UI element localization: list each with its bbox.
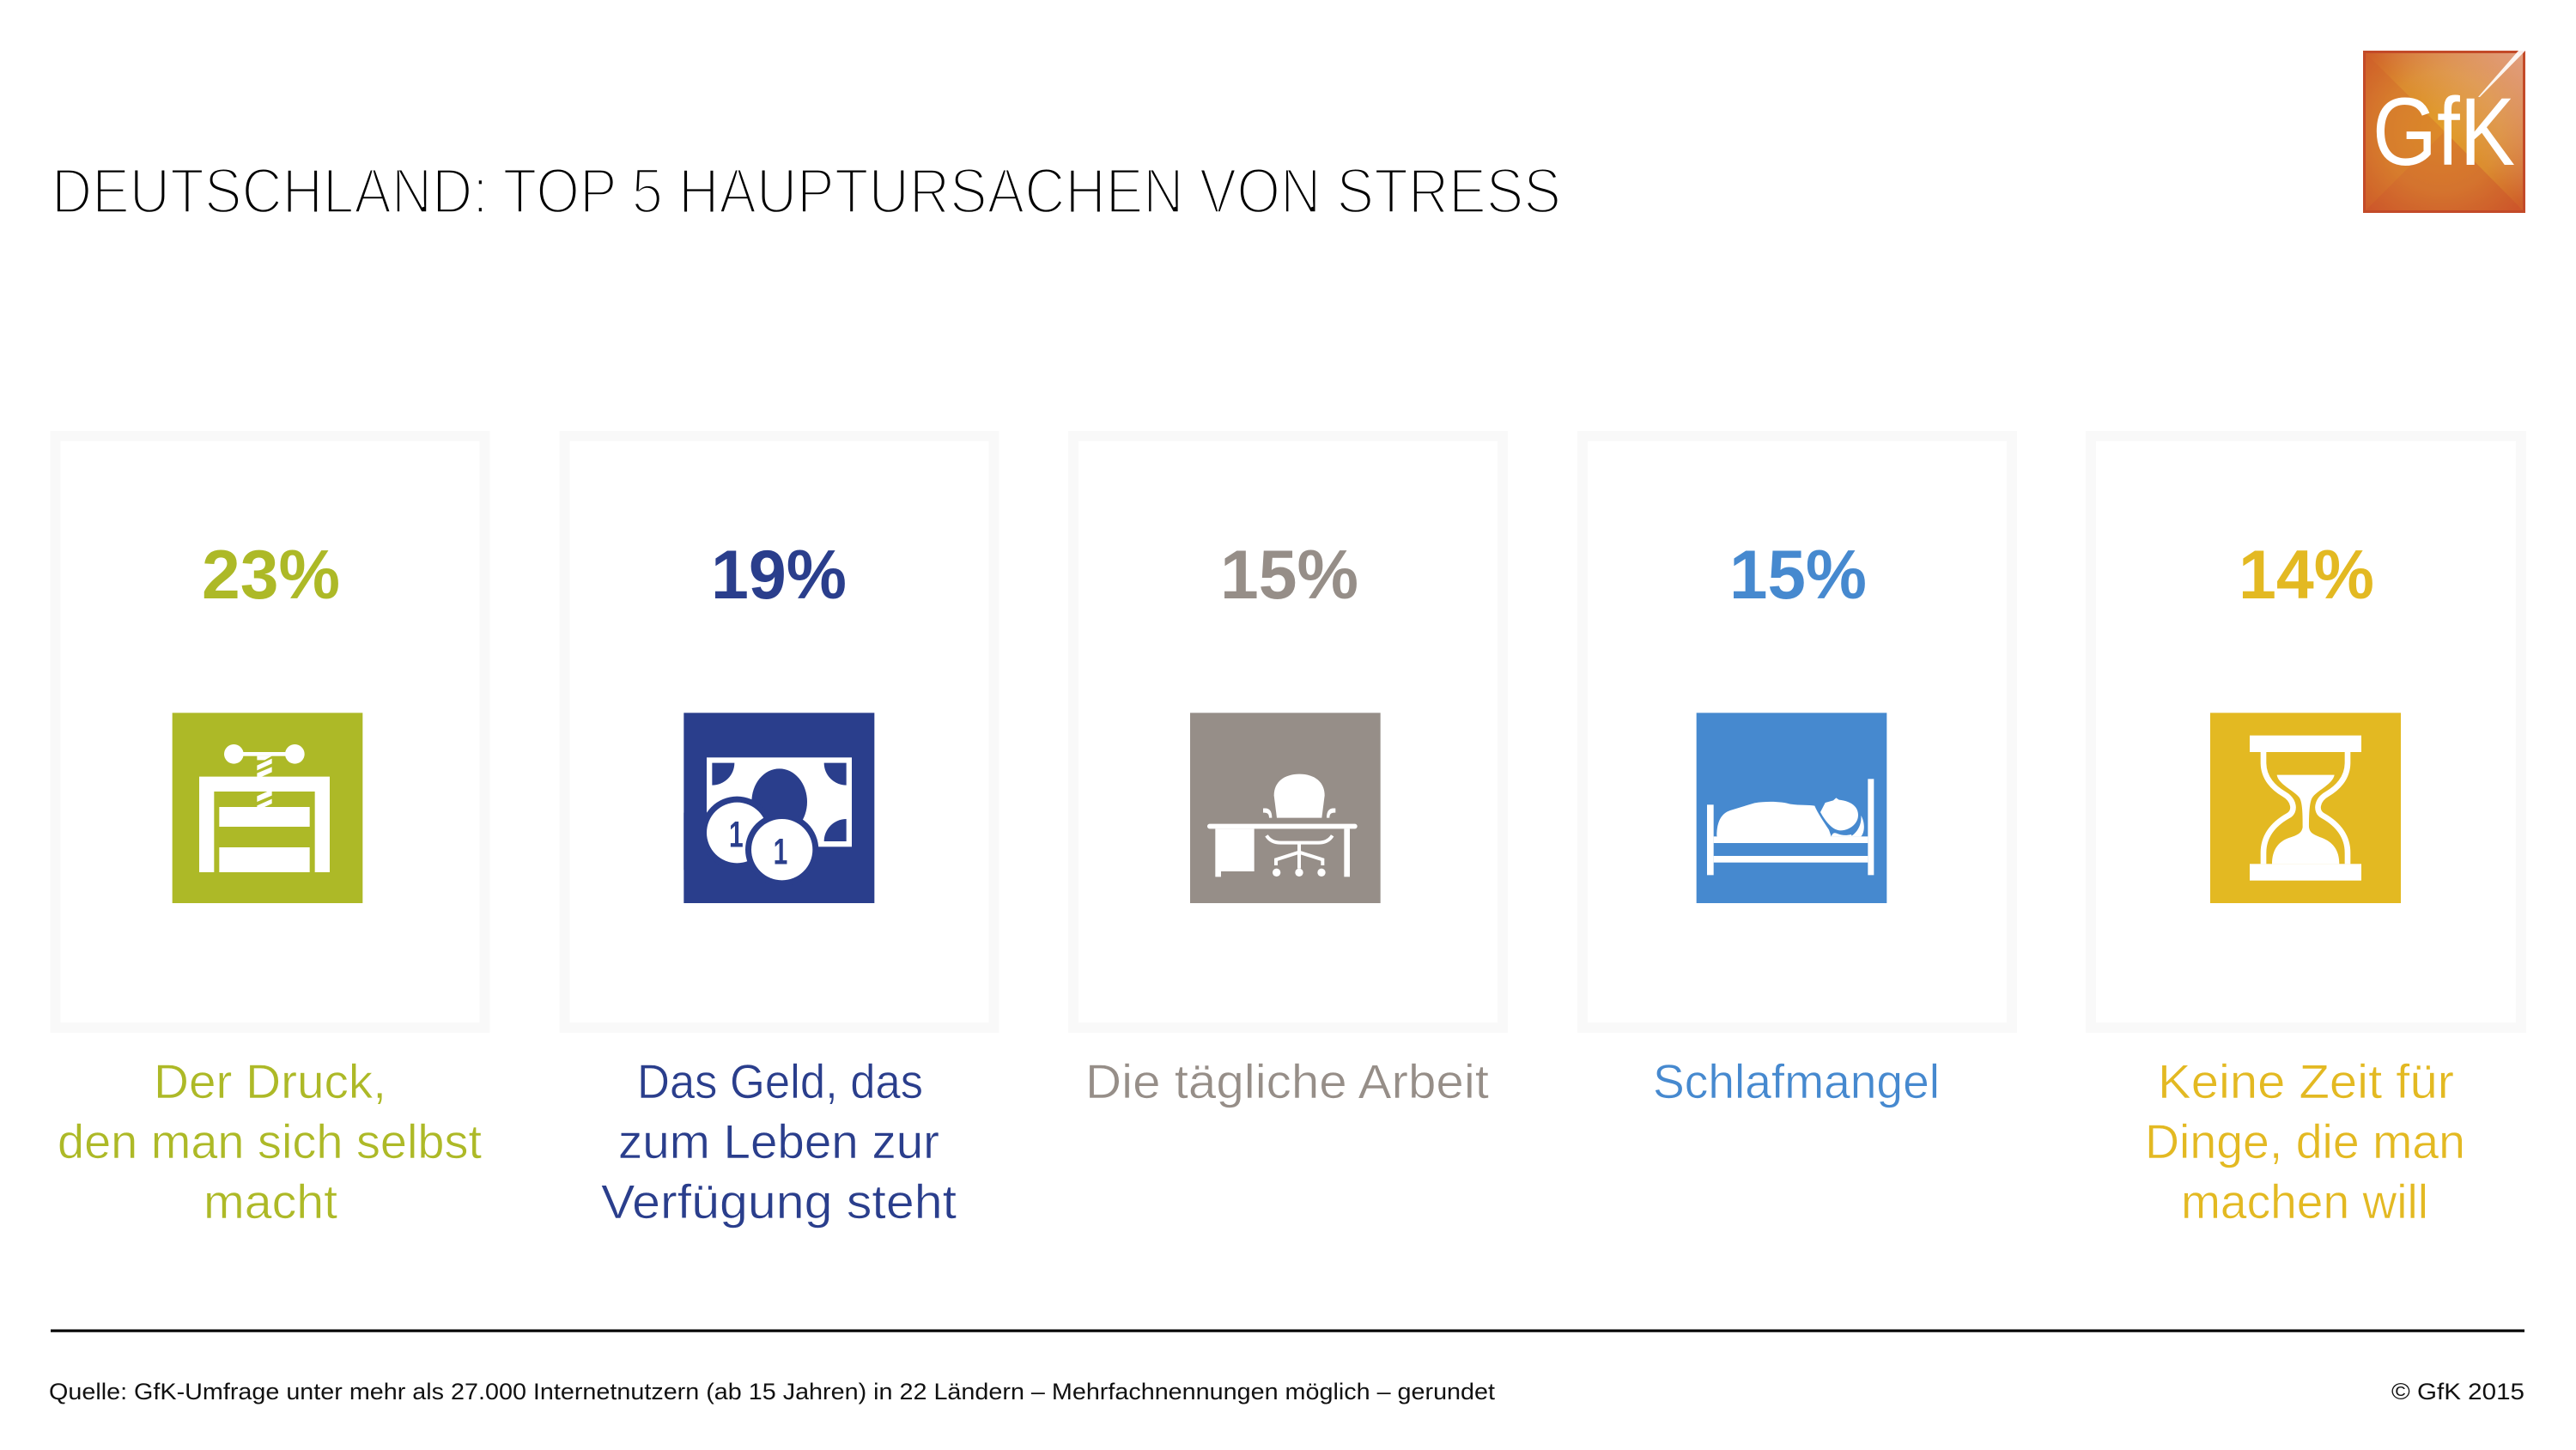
logo: GfK (2363, 51, 2525, 213)
icon: hourglass (2210, 713, 2401, 903)
source note: Quelle: GfK-Umfrage unter mehr als 27.000 Internetnutzern (ab 15 Jahren) in 22 Ländern – Mehrfachnennungen möglich – gerundet (49, 1379, 1496, 1404)
caption (58, 1054, 482, 1229)
percentage: 23% (202, 537, 340, 614)
caption (2145, 1054, 2465, 1229)
icon: bed (1697, 713, 1886, 903)
panel frame (2091, 436, 2521, 1028)
caption: Verfügung steht (601, 1174, 957, 1229)
icon: money: 1 (729, 815, 744, 856)
percentage: 19% (711, 537, 847, 614)
caption: machen will (2181, 1174, 2428, 1229)
caption: Schlafmangel (1653, 1054, 1940, 1108)
caption (601, 1054, 957, 1229)
title: DEUTSCHLAND: TOP 5 HAUPTURSACHEN VON STRESS (52, 155, 1561, 227)
percentage: 15% (1729, 537, 1867, 614)
caption: Der Druck, (154, 1054, 386, 1108)
caption: den man sich selbst (58, 1114, 482, 1168)
panel: Die tägliche Arbeit 15% (1073, 436, 1503, 1108)
logo: GfK: GfK (2372, 78, 2515, 185)
icon: desk (1190, 713, 1381, 903)
icon: press (173, 713, 362, 903)
caption: zum Leben zur (618, 1114, 939, 1168)
caption: Das Geld, das (637, 1054, 923, 1108)
caption: Dinge, die man (2145, 1114, 2465, 1168)
caption: macht (204, 1174, 337, 1229)
icon: money (683, 713, 874, 903)
icon: money: 1 (774, 832, 787, 873)
panel: Schlafmangel 15% (1583, 436, 2012, 1108)
panel: Der Druck 23% (55, 436, 484, 1229)
panel frame (565, 436, 994, 1028)
caption: Keine Zeit für (2158, 1054, 2454, 1108)
panel frame (1583, 436, 2012, 1028)
percentage: 14% (2239, 537, 2374, 614)
panel: Keine Zeit 14% (2091, 436, 2521, 1229)
panel: Das Geld 19% (565, 436, 994, 1229)
caption: Die tägliche Arbeit (1085, 1054, 1489, 1108)
panel frame (1073, 436, 1503, 1028)
percentage: 15% (1220, 537, 1358, 614)
copyright: © GfK 2015 (2391, 1379, 2524, 1404)
panel frame (55, 436, 484, 1028)
